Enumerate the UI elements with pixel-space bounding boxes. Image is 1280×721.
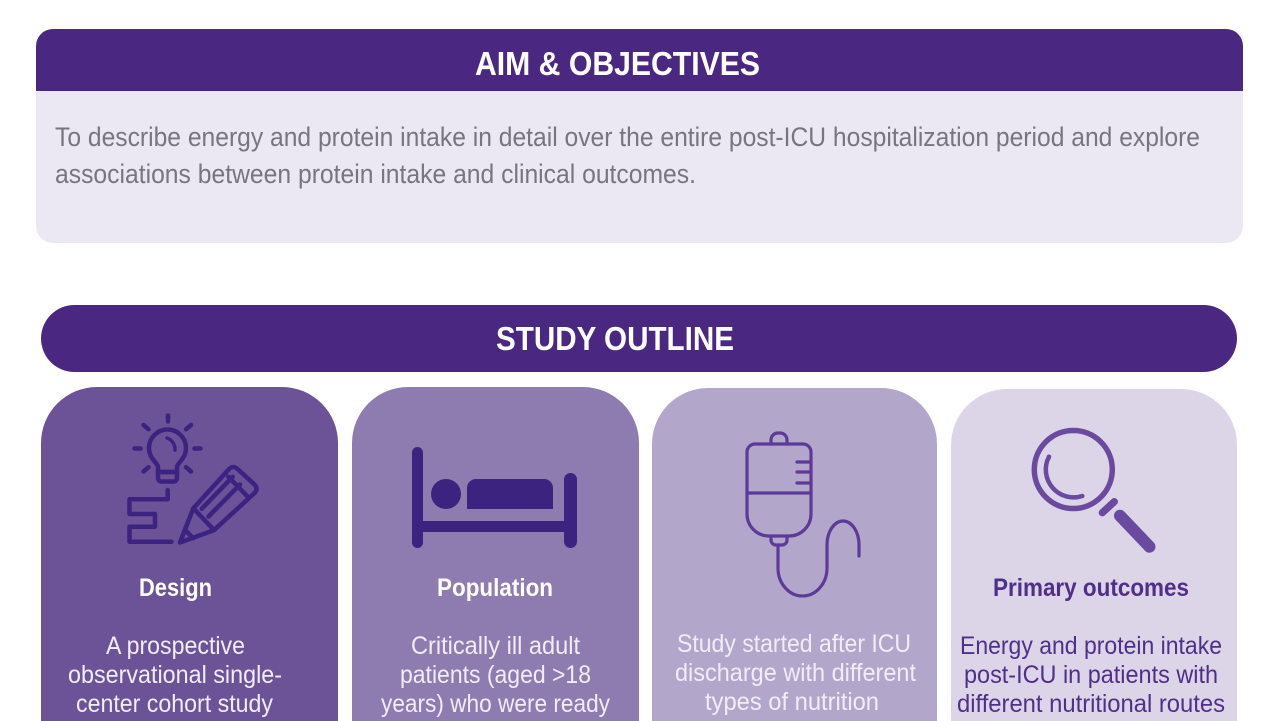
text block: primary outcomes description	[957, 632, 1225, 718]
text block: primary outcomes description: different nutritional routes	[957, 690, 1225, 718]
heading: design: Design	[139, 574, 212, 602]
heading: primary outcomes: Primary outcomes	[993, 574, 1189, 602]
panel: design	[41, 387, 338, 721]
text block: design description: center cohort study	[76, 690, 273, 718]
text block: nutrition description: types of nutrition	[705, 688, 879, 716]
text block: population description: patients (aged >18	[400, 661, 591, 689]
icon: magnifying glass	[1034, 430, 1150, 547]
text block: nutrition description	[675, 630, 916, 716]
heading bar: study outline: STUDY OUTLINE	[496, 320, 734, 357]
heading: population: Population	[437, 574, 553, 602]
panel: primary outcomes	[951, 389, 1237, 721]
text block: aim description	[55, 122, 1200, 189]
text block: population description	[381, 632, 610, 718]
panel: nutrition	[652, 388, 937, 721]
heading bar: study outline	[41, 305, 1237, 372]
text block: nutrition description: discharge with different	[675, 659, 916, 687]
panel: aim and objectives	[36, 29, 1243, 243]
text block: primary outcomes description: Energy and protein intake	[960, 632, 1222, 660]
text block: design description: observational single-	[68, 661, 282, 689]
text block: primary outcomes description: post-ICU in patients with	[964, 661, 1218, 689]
panel: population	[352, 387, 639, 721]
icon: IV drip bag	[747, 433, 859, 596]
icon: light bulb and pencil	[130, 416, 257, 542]
text block: design description	[68, 632, 282, 718]
text block: aim description: To describe energy and protein intake in detail over the entire post-ICU hospitalization period and explore	[55, 122, 1200, 152]
text block: design description: A prospective	[106, 632, 245, 660]
text block: population description: Critically ill adult	[411, 632, 580, 660]
text block: aim description: associations between protein intake and clinical outcomes.	[55, 159, 696, 189]
text block: nutrition description: Study started after ICU	[677, 630, 911, 658]
icon: hospital bed	[412, 447, 577, 548]
heading: aim and objectives: AIM & OBJECTIVES	[475, 45, 760, 82]
text block: population description: years) who were ready	[381, 690, 610, 718]
